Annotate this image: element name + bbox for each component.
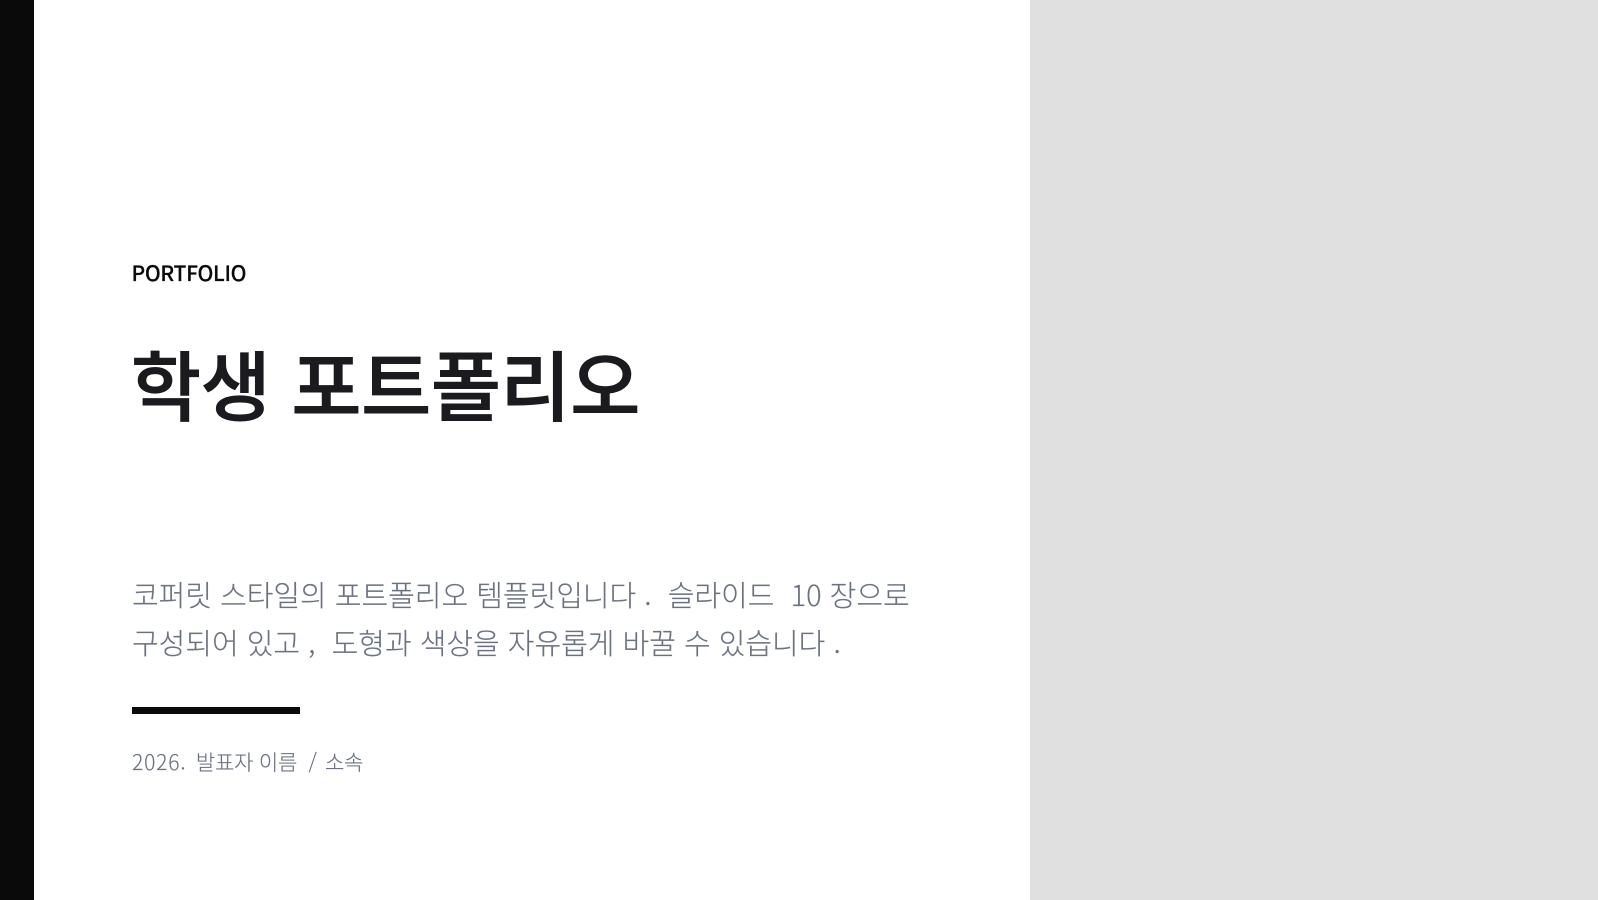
date and presenter: 2026. 발표자 이름 / 소속 xyxy=(132,747,363,777)
description text: 코퍼릿 스타일의 포트폴리오 템플릿입니다 . 슬라이드 10 장으로 구성되어 있고 , 도형과 색상을 자유롭게 바꿀 수 있습니다 . xyxy=(132,573,910,663)
divider rule xyxy=(132,707,300,714)
right grey panel xyxy=(1030,0,1598,900)
title: 학생 포트폴리오 xyxy=(131,327,640,437)
eyebrow label: PORTFOLIO xyxy=(132,258,246,288)
left black bar xyxy=(0,0,34,900)
